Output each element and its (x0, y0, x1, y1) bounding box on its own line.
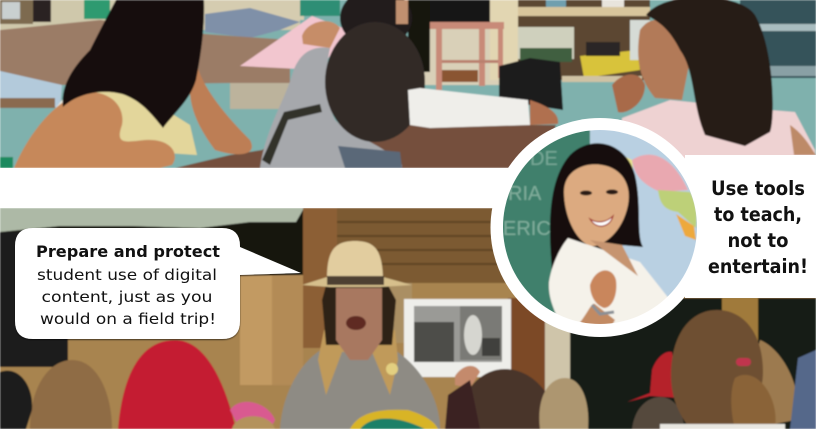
tip text: use tools to teach, not to entertain: Use tools (711, 177, 805, 200)
sub: boy in grey hoodie (260, 0, 558, 168)
callout: prepare and protect: Prepare and protect (36, 242, 220, 261)
callout: prepare and protect: would on a field trip! (40, 310, 216, 328)
sub: historic photo held up (404, 299, 511, 388)
sub: chalkboard: ERIC (503, 218, 551, 240)
sub: green and yellow hat (350, 410, 438, 429)
circular teacher portrait (490, 118, 710, 337)
sub: wall map (588, 130, 697, 297)
tip text: use tools to teach, not to entertain: to teach, (714, 203, 802, 226)
photo: classroom students at table (0, 0, 816, 168)
sub: girl in yellow shirt (14, 0, 252, 168)
sub: chalkboard (503, 130, 591, 314)
sub: chalkboard: DE (530, 148, 558, 170)
white panel behind tip text (685, 155, 816, 298)
sub: girl with pink shirt (612, 0, 816, 168)
tip text: use tools to teach, not to entertain: entertain! (708, 255, 808, 278)
photo: park ranger with students (0, 208, 816, 429)
callout: prepare and protect: student use of digital (37, 266, 217, 284)
sub: chalkboard: RIA (508, 183, 542, 205)
tip text: use tools to teach, not to entertain (708, 177, 808, 278)
callout: prepare and protect: content, just as you (42, 288, 212, 306)
sub: park ranger (280, 241, 440, 429)
sub: teacher figure (549, 143, 670, 325)
tip text: use tools to teach, not to entertain: not to (728, 229, 788, 252)
sub: students in foreground (0, 310, 816, 429)
callout: prepare and protect (15, 228, 301, 339)
